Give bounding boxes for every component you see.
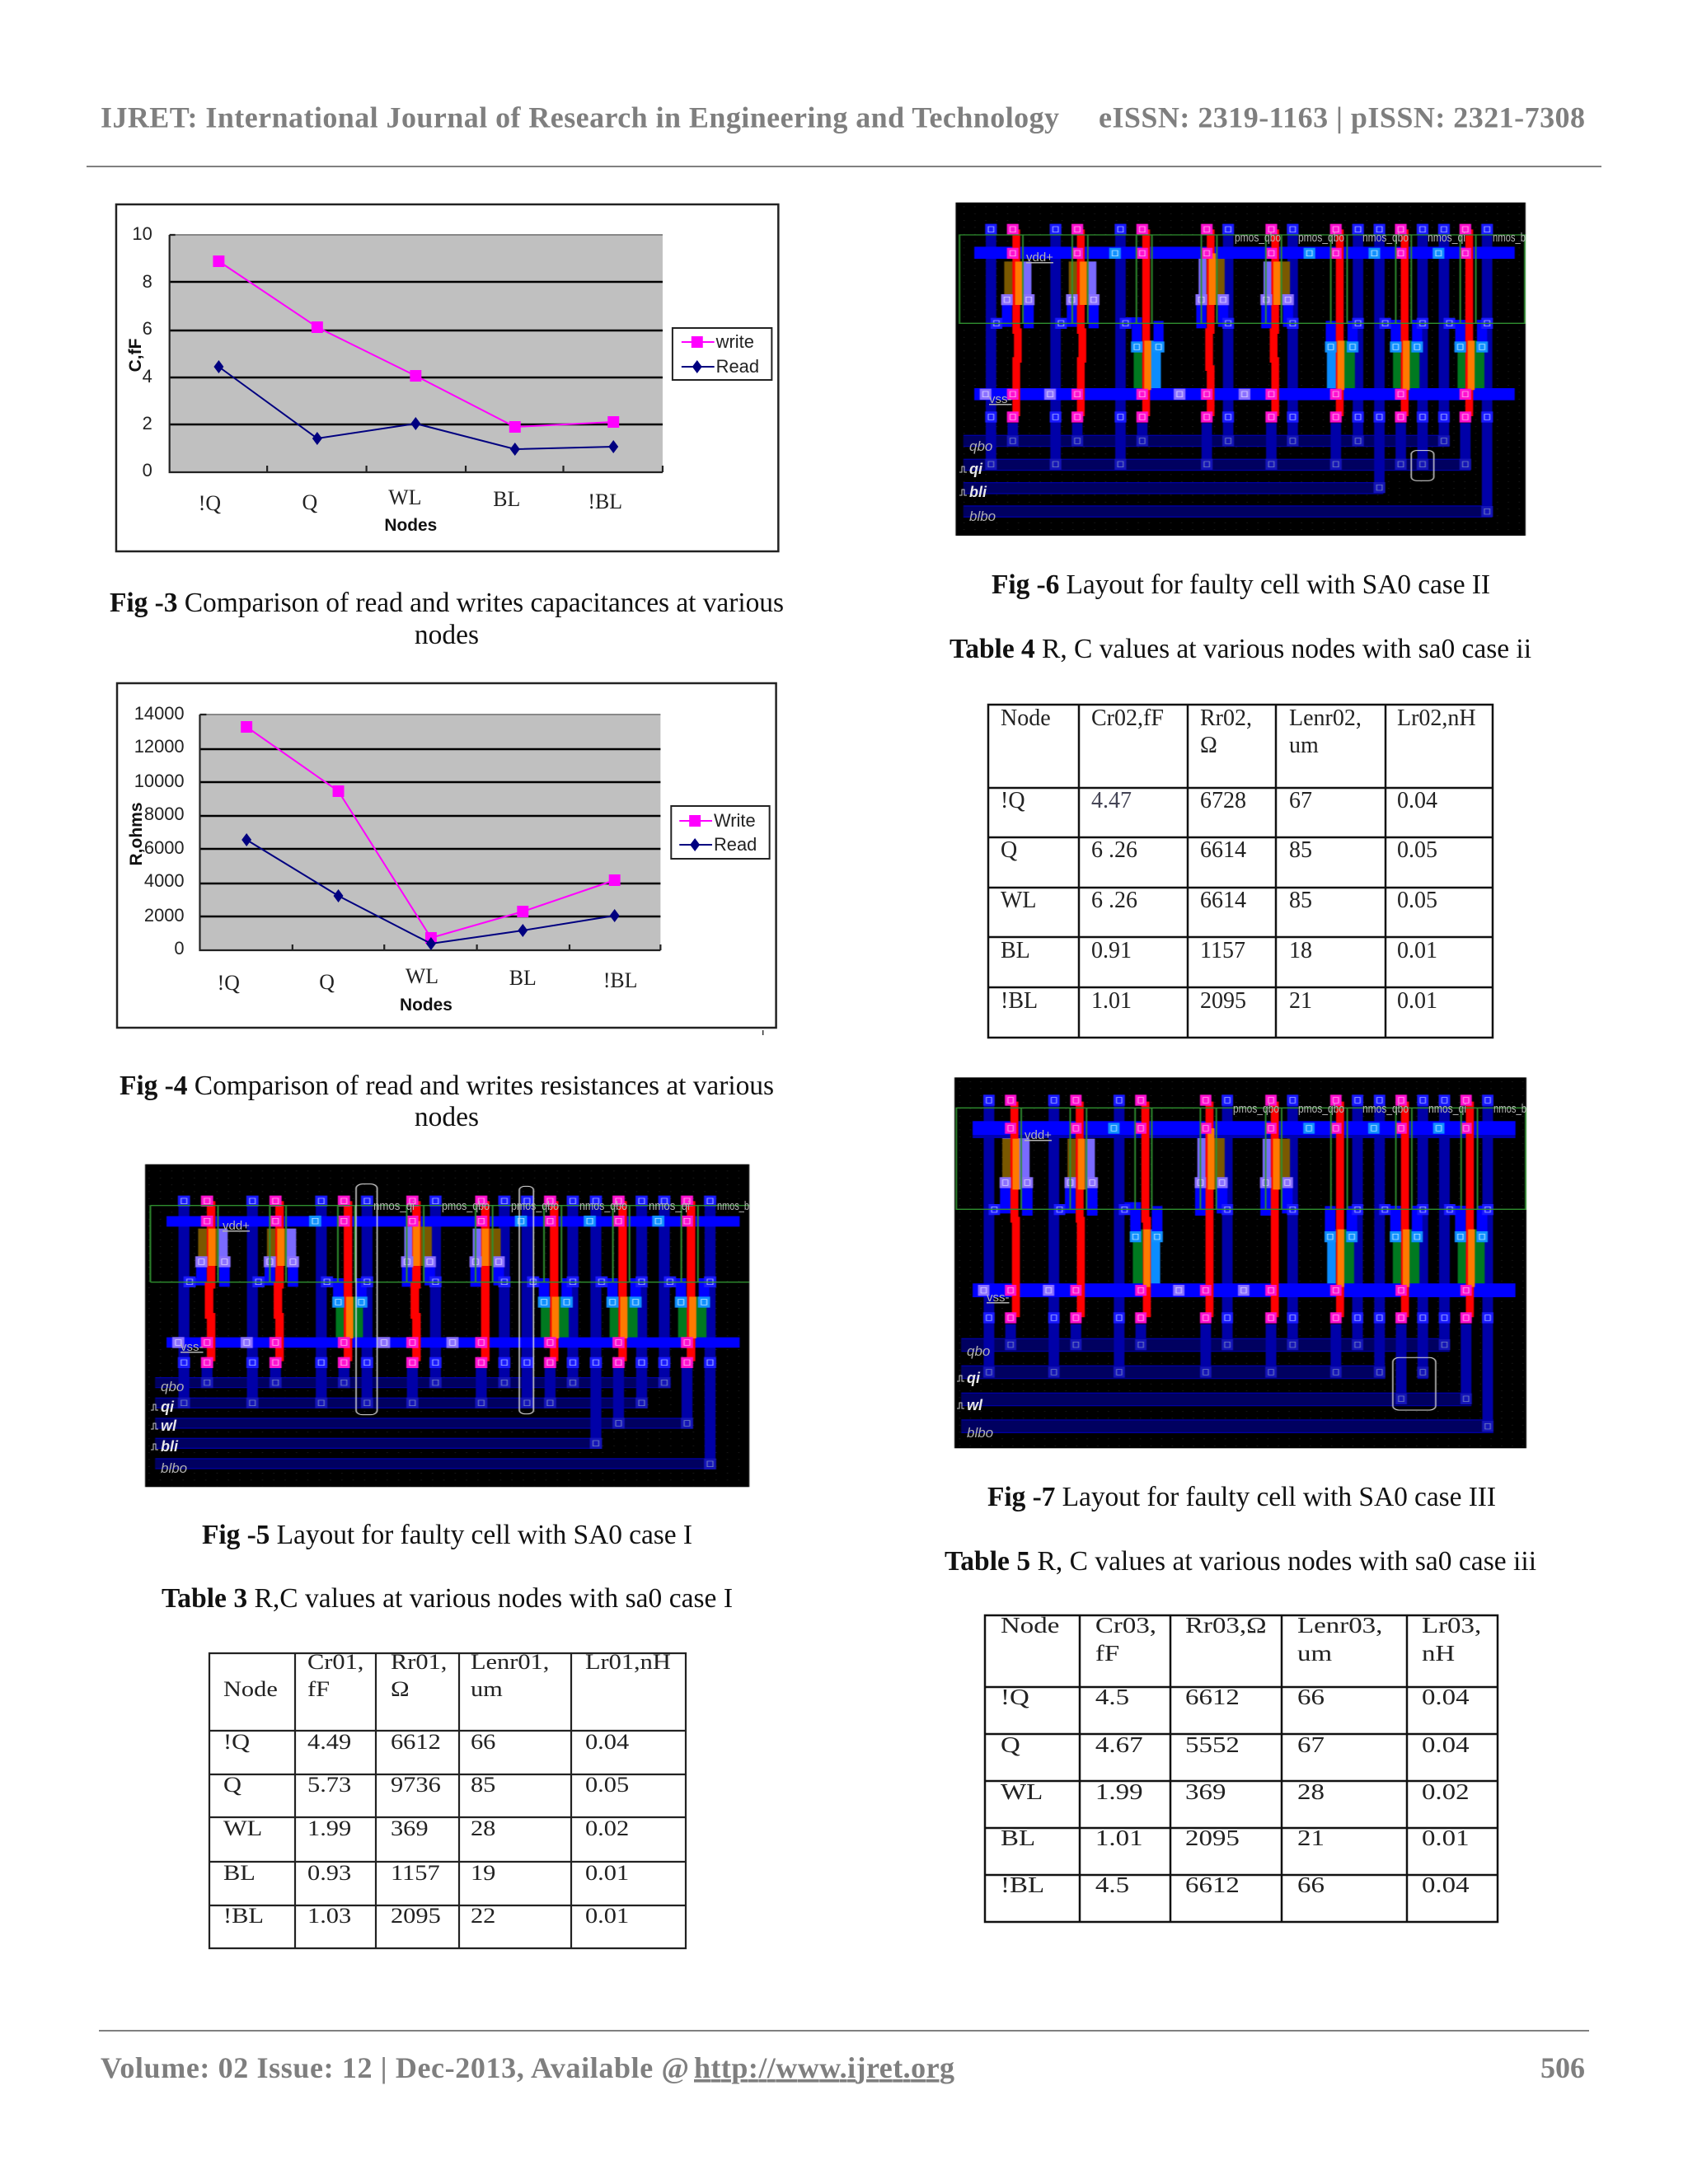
layout labels: qbo [161, 1379, 184, 1394]
y axis labels: 0 [143, 460, 152, 480]
fault highlight [1393, 1357, 1436, 1410]
table 3: Rr01, [391, 1651, 447, 1674]
caption: Fig 4: Fig -4 Comparison of read and writes resistances at various [120, 1071, 774, 1101]
table 3: Lr01,nH [585, 1651, 671, 1674]
table 5: 0.04 [1422, 1732, 1470, 1757]
layout labels: pmos_qbo [1298, 231, 1344, 245]
table 3: 5.73 [307, 1774, 351, 1797]
table 4: 85 [1289, 837, 1312, 863]
poly gates [1016, 229, 1470, 416]
layout labels: nmos_qi [649, 1199, 690, 1213]
caption: Table 5: Table 5 R, C values at various nodes with sa0 case iii [945, 1546, 1536, 1577]
contacts [172, 1196, 716, 1469]
table 4: Rr02, [1200, 705, 1252, 731]
table 5: 1.99 [1095, 1779, 1143, 1804]
legend: write [715, 331, 754, 352]
x axis labels: !BL [588, 490, 622, 513]
fault highlights [356, 1184, 533, 1415]
table 5: !BL [1001, 1872, 1044, 1897]
table 5: um [1297, 1641, 1332, 1666]
legend [673, 328, 771, 380]
layout labels: qbo [967, 1343, 990, 1359]
table 5: 0.04 [1422, 1685, 1470, 1709]
layout labels [959, 231, 1526, 524]
table 4: Cr02,fF [1091, 705, 1164, 731]
page header: eISSN: 2319-1163 | pISSN: 2321-7308 [1099, 101, 1585, 134]
x axis labels [199, 485, 622, 515]
caption: Fig 7: Fig -7 Layout for faulty cell with SA0 case III [987, 1482, 1496, 1512]
cell boundaries [959, 235, 1525, 323]
layout labels: qbo [969, 438, 992, 454]
x axis labels: WL [388, 485, 421, 509]
layout labels: vss- [181, 1340, 203, 1354]
layout labels: bli [161, 1438, 179, 1455]
table 4: 0.05 [1397, 837, 1437, 863]
table 3: 85 [471, 1774, 495, 1797]
layout labels: pmos_qbo [1233, 1102, 1279, 1116]
contacts [978, 1094, 1493, 1432]
y axis labels: 12000 [134, 736, 185, 757]
page footer: Volume: 02 Issue: 12 | Dec-2013, Available @ [101, 2051, 689, 2084]
layout labels: nmos_qi [1428, 231, 1465, 245]
layout labels [957, 1102, 1526, 1441]
layout labels: wl [161, 1418, 177, 1434]
y axis labels: 10 [132, 223, 152, 244]
table 3: Q [223, 1774, 241, 1797]
table 4: 1157 [1200, 938, 1245, 963]
signal buses [155, 1383, 715, 1464]
table 5: 2095 [1185, 1825, 1240, 1850]
power rails [974, 253, 1515, 394]
table 3: 0.02 [585, 1817, 629, 1840]
y axis title: R,ohms [127, 803, 146, 865]
layout: faulty cell SA0 case III (Fig 7) [954, 1077, 1526, 1448]
table 4: 18 [1289, 938, 1312, 963]
table 3: 6612 [391, 1731, 441, 1754]
table 3: 22 [471, 1905, 495, 1928]
y axis labels: 6000 [144, 837, 185, 858]
y axis labels: 2000 [144, 905, 185, 926]
layout labels: wl [967, 1397, 983, 1413]
y axis labels: 2 [143, 413, 152, 434]
power rails [973, 1104, 1516, 1155]
table 3: 1157 [391, 1862, 440, 1885]
read series [213, 360, 618, 456]
table 5: 67 [1297, 1732, 1325, 1757]
table 4: 6614 [1200, 888, 1246, 913]
table 5: BL [1001, 1825, 1035, 1850]
table 3: 0.01 [585, 1905, 629, 1928]
table 5: 0.01 [1422, 1825, 1470, 1850]
page footer: 506 [1540, 2051, 1585, 2084]
table 3: !Q [223, 1731, 250, 1754]
table 5: 5552 [1185, 1732, 1240, 1757]
caption: Fig 5: Fig -5 Layout for faulty cell with SA0 case I [202, 1520, 692, 1550]
table 3: BL [223, 1862, 256, 1885]
x axis labels: Q [302, 490, 318, 514]
layout labels: blbo [967, 1425, 993, 1441]
page header [87, 101, 1601, 167]
metal stubs [996, 300, 1487, 347]
table 4: Ω [1200, 733, 1217, 758]
x axis labels: !Q [218, 971, 240, 995]
table 4: 6728 [1200, 788, 1246, 813]
page footer [99, 2030, 1589, 2084]
table 3: 28 [471, 1817, 495, 1840]
y axis title: C,fF [126, 338, 145, 372]
caption: Fig 3: nodes [415, 620, 479, 650]
caption: Fig 4 [120, 1071, 774, 1132]
table 3: 0.01 [585, 1862, 629, 1885]
table 5: 66 [1297, 1872, 1325, 1897]
layout labels: nmos_qbo [579, 1199, 627, 1213]
y axis labels: 8000 [144, 804, 185, 824]
table 4: 2095 [1200, 988, 1246, 1014]
table 4: 67 [1289, 788, 1312, 813]
table 4: 85 [1289, 888, 1312, 913]
diffusion regions [198, 1221, 706, 1338]
poly gates [209, 1201, 691, 1361]
contacts [980, 224, 1493, 517]
table 3: WL [223, 1817, 262, 1840]
layout labels: nmos_b [717, 1199, 749, 1213]
table 3: Lenr01, [471, 1651, 549, 1674]
x axis labels: !BL [603, 968, 637, 992]
y axis labels: 0 [174, 938, 185, 958]
write series [241, 721, 621, 944]
table 4: 4.47 [1091, 788, 1132, 813]
table 4: 1.01 [1091, 988, 1132, 1014]
write series [213, 255, 619, 433]
y axis labels [134, 703, 185, 958]
layout labels [151, 1199, 749, 1476]
table 3: 1.99 [307, 1817, 351, 1840]
legend: Write [714, 810, 756, 831]
table 4: WL [1001, 888, 1037, 913]
cell boundaries [150, 1206, 749, 1282]
table 4: 21 [1289, 988, 1312, 1014]
layout labels: pmos_qbo [1298, 1102, 1344, 1116]
table 5: Lr03, [1422, 1613, 1481, 1638]
y axis labels: 10000 [134, 771, 185, 791]
table 4: 0.01 [1397, 988, 1437, 1014]
table 3: Ω [391, 1678, 410, 1701]
table 5: 6612 [1185, 1872, 1240, 1897]
table 5: 66 [1297, 1685, 1325, 1709]
chart: capacitance by node (Fig 3) [116, 204, 778, 551]
layout labels: nmos_b [1493, 231, 1526, 245]
table 3: 9736 [391, 1774, 441, 1797]
caption: Table 3: Table 3 R,C values at various nodes with sa0 case I [162, 1583, 733, 1614]
table 3: Node [223, 1678, 278, 1701]
table 4: !Q [1001, 788, 1025, 813]
signal buses [961, 1345, 1493, 1427]
table 5: fF [1095, 1641, 1119, 1666]
table 3: 0.05 [585, 1774, 629, 1797]
metal stubs [190, 1262, 710, 1302]
metal columns [989, 1094, 1488, 1427]
table 3: 66 [471, 1731, 495, 1754]
x axis title: Nodes [384, 516, 437, 535]
table 5: 0.02 [1422, 1779, 1470, 1804]
y axis labels: 14000 [134, 703, 185, 724]
x axis labels: WL [406, 964, 438, 988]
layout labels: nmos_qbo [1362, 231, 1409, 245]
x axis labels: BL [493, 487, 520, 511]
legend: Read [716, 356, 759, 377]
diffusion regions [1002, 1128, 1484, 1287]
layout labels: nmos_qbo [1362, 1102, 1409, 1116]
table 5: WL [1001, 1779, 1043, 1804]
metal columns [991, 224, 1487, 512]
y axis labels [132, 223, 152, 480]
cell boundaries [956, 1108, 1526, 1209]
table 5: !Q [1001, 1685, 1029, 1709]
table 5: Rr03,Ω [1185, 1613, 1267, 1638]
x axis labels: BL [509, 966, 537, 990]
table 4: 0.04 [1397, 788, 1437, 813]
table 4: 0.01 [1397, 938, 1437, 963]
table 3: fF [307, 1678, 330, 1701]
caption: Fig 3 [110, 588, 784, 650]
table 4: 6 .26 [1091, 837, 1137, 863]
table 3: um [471, 1678, 503, 1701]
table 5: 4.67 [1095, 1732, 1143, 1757]
poly gates [1015, 1102, 1470, 1317]
x axis labels [218, 964, 637, 995]
table 5: 21 [1297, 1825, 1325, 1850]
table 5: 4.5 [1095, 1685, 1129, 1709]
table 3: 369 [391, 1817, 429, 1840]
table 3: 4.49 [307, 1731, 351, 1754]
table 5: Q [1001, 1732, 1020, 1757]
metal columns [184, 1197, 710, 1464]
table 5: nH [1422, 1641, 1455, 1666]
y axis labels: 4000 [144, 870, 185, 891]
table 3: !BL [223, 1905, 264, 1928]
layout: faulty cell SA0 case II (Fig 6) [955, 203, 1526, 536]
x axis title: Nodes [400, 996, 452, 1015]
table 4: um [1289, 733, 1319, 758]
layout labels: nmos_b [1493, 1102, 1526, 1116]
table 3: 2095 [391, 1905, 441, 1928]
page header: IJRET: International Journal of Research in Engineering and Technology [101, 101, 1059, 134]
layout labels: nmos_qi [1428, 1102, 1466, 1116]
table 4: Node [1001, 705, 1051, 731]
caption: Table 4: Table 4 R, C values at various nodes with sa0 case ii [950, 634, 1531, 664]
y axis labels: 4 [143, 366, 152, 387]
layout labels: pmos_qbo [1235, 231, 1281, 245]
power rails [166, 1221, 739, 1343]
table 4: Lenr02, [1289, 705, 1362, 731]
layout labels: vdd+ [1025, 1128, 1052, 1142]
layout labels: vdd+ [223, 1219, 250, 1233]
table 4: Lr02,nH [1397, 705, 1476, 731]
table 3 [209, 1651, 686, 1948]
chart: resistance by node (Fig 4) [117, 683, 776, 1035]
read series [241, 833, 620, 950]
table 5: 1.01 [1095, 1825, 1143, 1850]
table 3: 0.93 [307, 1862, 351, 1885]
table 5: 28 [1297, 1779, 1325, 1804]
layout labels: pmos_qbo [442, 1199, 490, 1213]
table 5: Lenr03, [1297, 1613, 1382, 1638]
layout labels: pmos_qbo [511, 1199, 559, 1213]
table 4: Q [1001, 837, 1017, 863]
table 4: 6 .26 [1091, 888, 1137, 913]
caption: Fig 3: Fig -3 Comparison of read and writes capacitances at various [110, 588, 784, 618]
table 3: 1.03 [307, 1905, 351, 1928]
table 5: Cr03, [1095, 1613, 1156, 1638]
layout labels: nmos_qi [373, 1199, 415, 1213]
diffusion regions [1004, 253, 1484, 390]
table 4: 0.05 [1397, 888, 1437, 913]
table 5: 6612 [1185, 1685, 1240, 1709]
x axis labels: !Q [199, 491, 221, 515]
table 5: 0.04 [1422, 1872, 1470, 1897]
layout labels: qi [969, 461, 983, 477]
layout labels: qi [161, 1399, 175, 1415]
table 5: 4.5 [1095, 1872, 1129, 1897]
table 4: !BL [1001, 988, 1038, 1014]
table 3: 0.04 [585, 1731, 629, 1754]
caption: Fig 6: Fig -6 Layout for faulty cell with SA0 case II [992, 569, 1490, 600]
y axis labels: 6 [143, 318, 152, 339]
y axis labels: 8 [143, 271, 152, 292]
table 4 [988, 705, 1493, 1038]
layout labels: qi [967, 1370, 981, 1386]
page footer: http://www.ijret.org [694, 2051, 954, 2084]
legend [671, 806, 770, 859]
layout: faulty cell SA0 case I (Fig 5) [145, 1165, 749, 1487]
layout labels: blbo [969, 509, 996, 524]
table 3: 19 [471, 1862, 495, 1885]
layout labels: vdd+ [1026, 251, 1053, 265]
table 4: BL [1001, 938, 1030, 963]
metal stubs [994, 1183, 1488, 1237]
caption: Fig 4: nodes [415, 1102, 479, 1132]
table 4: 0.91 [1091, 938, 1132, 963]
table 4: 6614 [1200, 837, 1246, 863]
table 5 [985, 1613, 1498, 1922]
x axis labels: Q [319, 970, 335, 994]
layout labels: bli [969, 484, 987, 500]
table 3: Cr01, [307, 1651, 363, 1674]
fault highlight [1411, 451, 1434, 480]
table 5: Node [1001, 1613, 1059, 1638]
layout labels: vss- [987, 1291, 1009, 1305]
layout labels: vss- [989, 392, 1012, 406]
table 5: 369 [1185, 1779, 1226, 1804]
signal buses [964, 441, 1492, 512]
layout labels: blbo [161, 1460, 187, 1476]
legend: Read [714, 834, 757, 855]
